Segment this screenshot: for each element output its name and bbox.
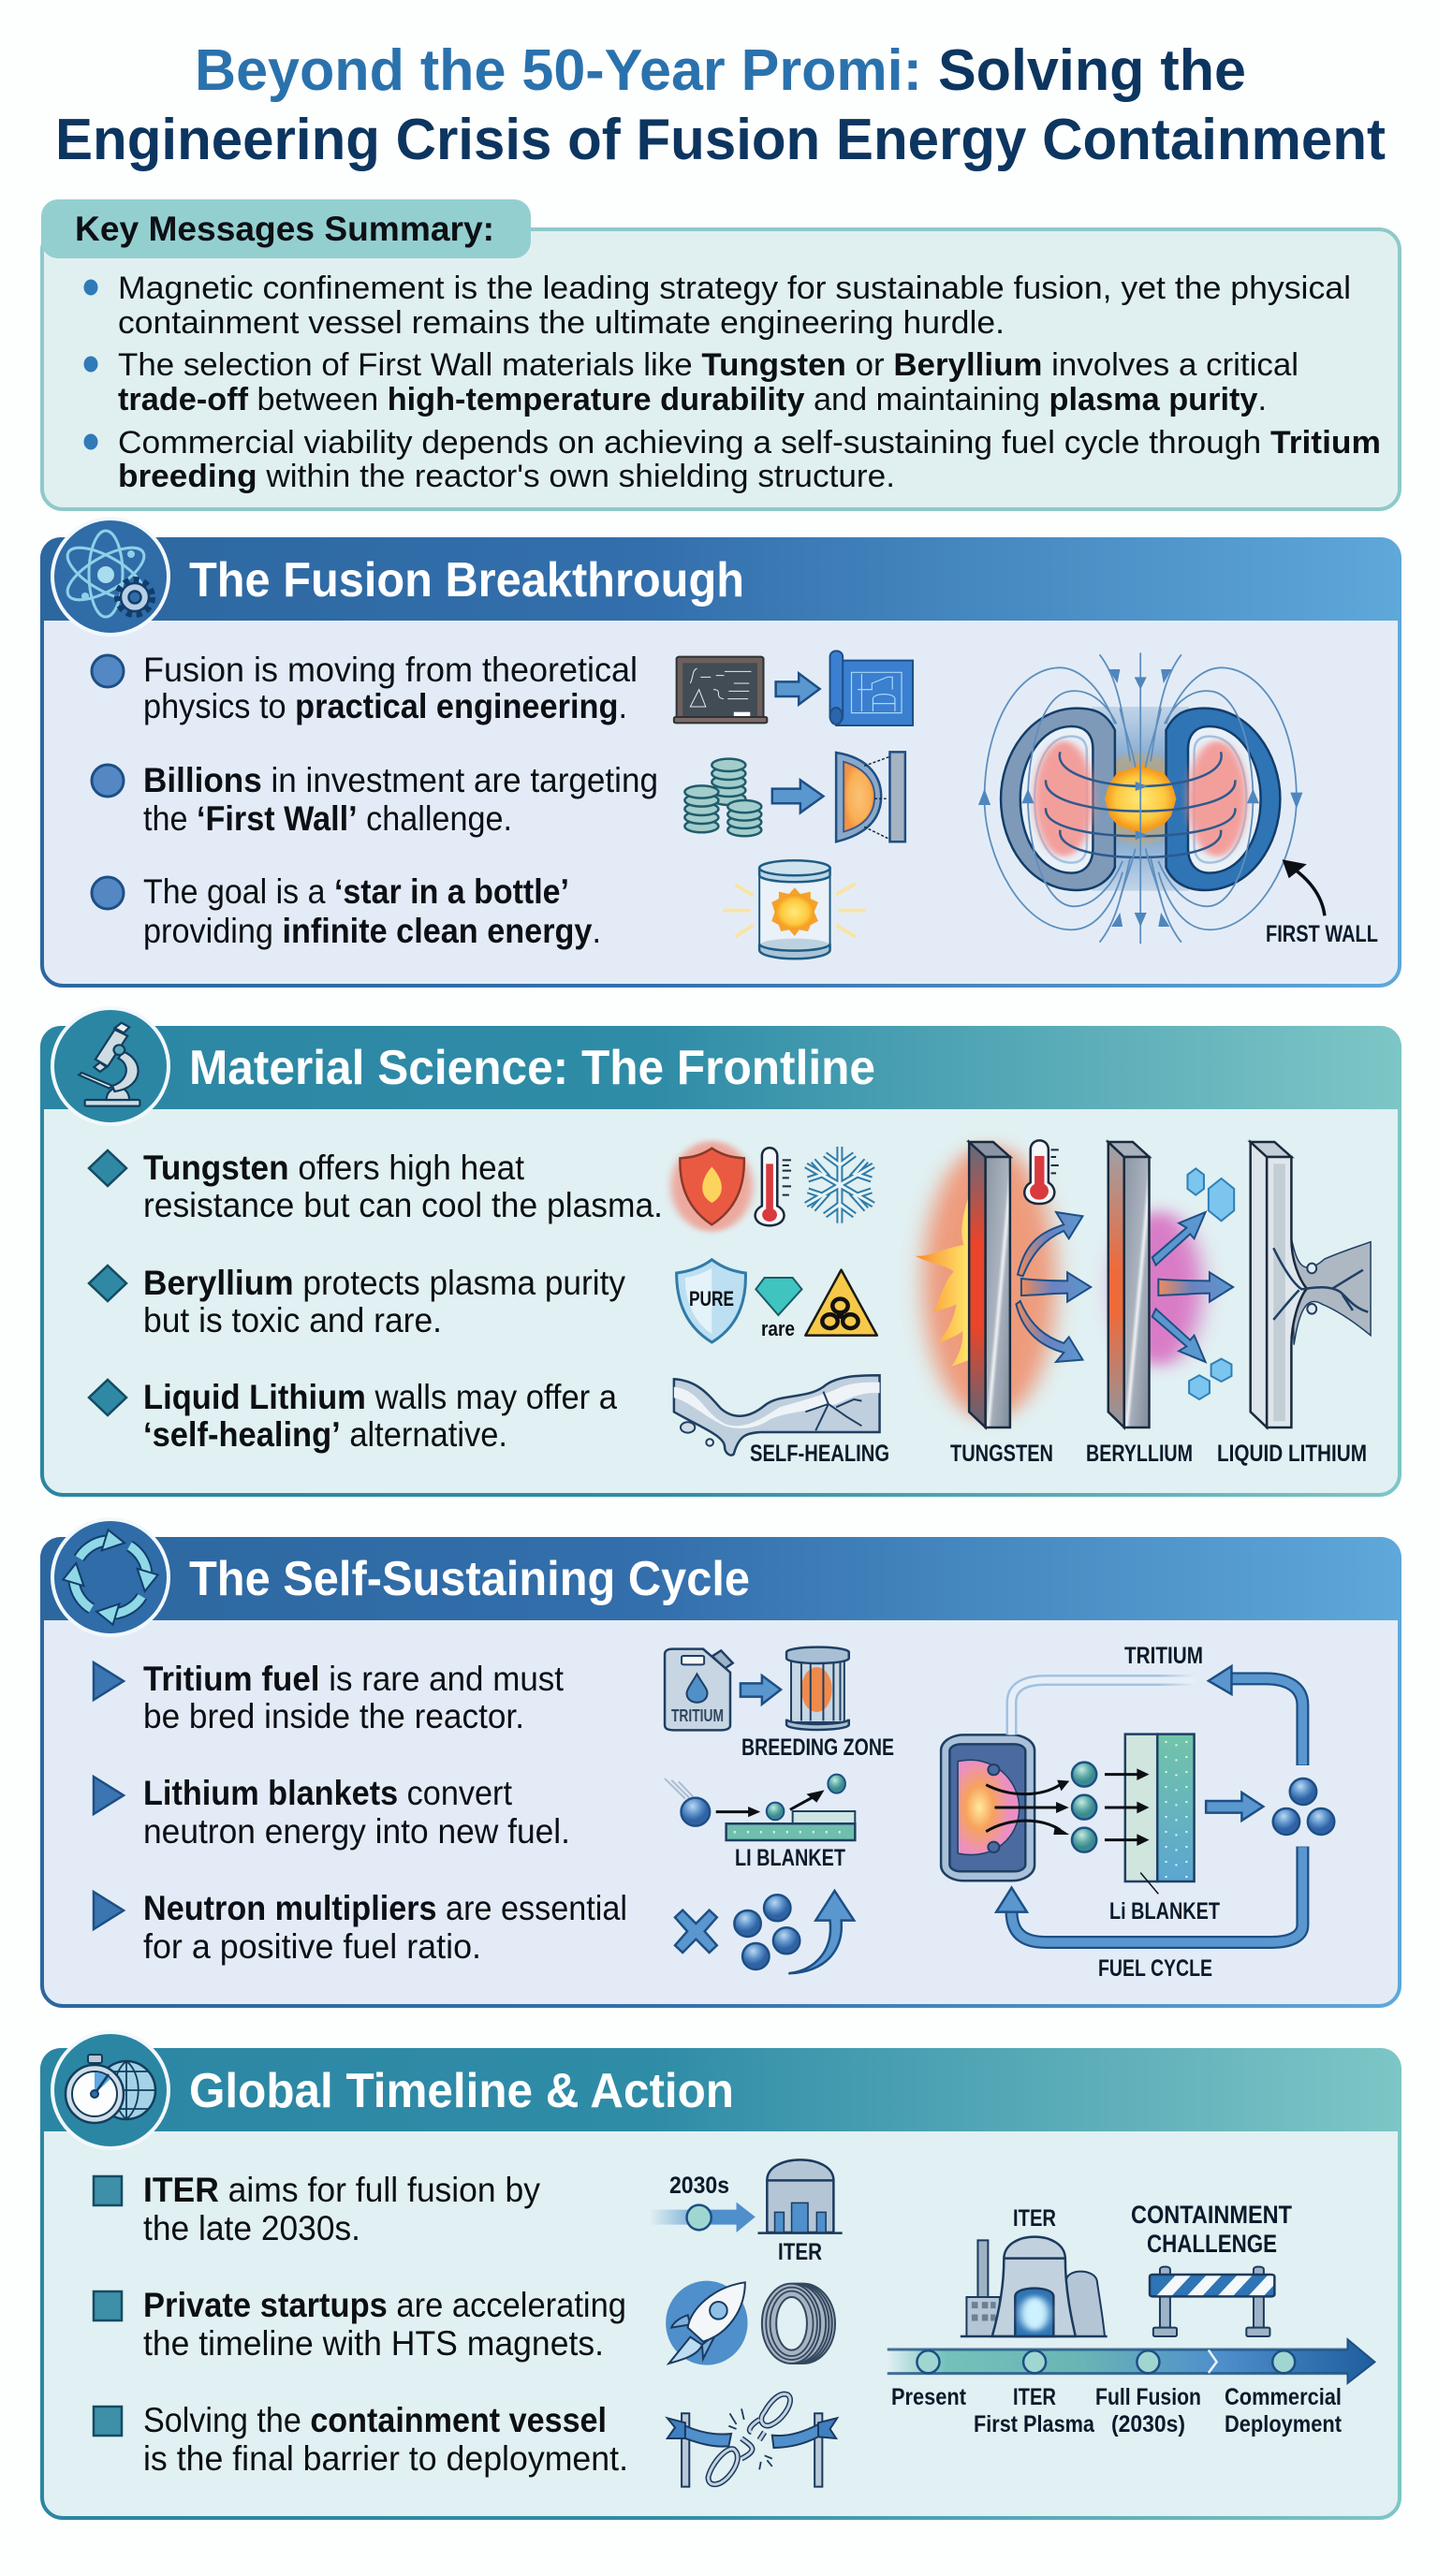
icon: coins to first wall [684, 752, 905, 842]
section header bar [40, 537, 1401, 621]
icon: atom and gear [52, 519, 169, 635]
bullet 1: Tungsten offers high heat [143, 1149, 525, 1187]
tritium return pipe [1012, 1680, 1196, 1734]
bullet 2 [92, 761, 658, 838]
teal particles [1072, 1763, 1096, 1852]
bullet 2: Private startups are accelerating [143, 2286, 626, 2324]
neutron arrows [986, 1780, 1069, 1835]
bullet 3: Solving the containment vessel [143, 2401, 607, 2439]
cycle illustrations [665, 1647, 1334, 1973]
li blanket block [1105, 1734, 1195, 1894]
icon: chalkboard to blueprint [674, 651, 913, 725]
cycle arrows [996, 1666, 1302, 1942]
bullet 3 [94, 1889, 627, 1966]
message 3: breeding within the reactor's own shielding structure. [118, 459, 895, 494]
bullet 1: Fusion is moving from theoretical [143, 651, 638, 689]
title [55, 38, 1386, 172]
message 2: trade-off between high-temperature durability and maintaining plasma purity. [118, 382, 1267, 417]
reactor vessel [941, 1734, 1034, 1881]
bullet 2 [89, 1264, 625, 1339]
bullet 2: neutron energy into new fuel. [143, 1812, 570, 1851]
bullet 1: the late 2030s. [143, 2209, 360, 2247]
label: li blanket: LI BLANKET [735, 1845, 845, 1871]
bullet 2: Beryllium protects plasma purity [143, 1264, 625, 1302]
bullet 3 [94, 2401, 628, 2478]
bullet 1 [94, 1660, 565, 1735]
timeline illustrations [650, 2159, 1374, 2487]
bullet 1: be bred inside the reactor. [143, 1697, 524, 1735]
panel: self-sustaining cycle [40, 1519, 1401, 2006]
icon: neutron hitting li blanket [665, 1775, 855, 1840]
fuel cycle diagram [941, 1666, 1334, 1942]
magnetic field lines [978, 652, 1302, 944]
material illustrations [671, 1140, 1371, 1456]
message 3: Commercial viability depends on achieving a self-sustaining fuel cycle through Tritium [118, 425, 1381, 461]
section heading: Global Timeline & Action [189, 2064, 734, 2118]
icon: broken chain and banner [668, 2394, 837, 2487]
icon: microscope [52, 1008, 169, 1124]
message 2: The selection of First Wall materials like Tungsten or Beryllium involves a critical [118, 347, 1299, 383]
timeline label: commercial deployment [1225, 2384, 1343, 2437]
timeline arrow [888, 2339, 1374, 2383]
bullet 2: but is toxic and rare. [143, 1301, 442, 1339]
bullet 3: The goal is a ‘star in a bottle’ [143, 872, 569, 911]
message 3 [84, 425, 1381, 494]
bullet 3: for a positive fuel ratio. [143, 1927, 481, 1966]
message 1 [84, 271, 1351, 341]
icon: rocket and hts coil [666, 2281, 835, 2365]
label: liquid lithium: LIQUID LITHIUM [1217, 1441, 1367, 1467]
icon: neutron multiplier [675, 1891, 854, 1973]
timeline label: commercial deployment: Deployment [1225, 2411, 1343, 2437]
message 1: Magnetic confinement is the leading strategy for sustainable fusion, yet the physical [118, 271, 1351, 306]
section heading: The Self-Sustaining Cycle [189, 1552, 750, 1606]
tungsten wall [916, 1140, 1091, 1427]
bullet 2 [94, 1774, 570, 1851]
label: 2030s: 2030s [669, 2173, 729, 2199]
bullet 1 [89, 1149, 663, 1224]
bullet 3: Neutron multipliers are essential [143, 1889, 627, 1927]
bullet 3 [92, 872, 601, 950]
liquid lithium wall [1251, 1142, 1371, 1427]
bullet 1: ITER aims for full fusion by [143, 2171, 540, 2209]
label: iter icon: ITER [778, 2239, 822, 2265]
section heading: Material Science: The Frontline [189, 1041, 875, 1095]
message 2 [84, 347, 1299, 417]
bullet 2: the timeline with HTS magnets. [143, 2324, 604, 2363]
label: iter facility: ITER [1013, 2205, 1056, 2232]
icon: circular arrows [52, 1519, 169, 1635]
bullet 3 [89, 1378, 617, 1454]
panel: the fusion breakthrough [40, 519, 1401, 986]
bullet 1 [94, 2171, 540, 2247]
left coil [1001, 709, 1115, 890]
icon: 2030s arrow to iter building [650, 2159, 843, 2233]
section header bar [40, 1026, 1401, 1109]
timeline label: full fusion 2030s: (2030s) [1111, 2411, 1185, 2437]
bullet 2: Billions in investment are targeting [143, 761, 658, 799]
label: li blanket diagram: Li BLANKET [1109, 1898, 1220, 1925]
label: breeding zone: BREEDING ZONE [741, 1734, 894, 1761]
label: tritium: TRITIUM [1124, 1643, 1203, 1669]
label: tungsten: TUNGSTEN [950, 1441, 1053, 1467]
bullet 3: is the final barrier to deployment. [143, 2439, 628, 2478]
icons: fusion bullets [674, 651, 1325, 959]
section header bar [40, 2048, 1401, 2131]
icon: stopwatch and globe [52, 2032, 169, 2148]
message 1: containment vessel remains the ultimate engineering hurdle. [118, 305, 1005, 341]
timeline label: present: Present [891, 2384, 967, 2410]
bullet 2: Lithium blankets convert [143, 1774, 513, 1812]
label: containment challenge: CHALLENGE [1147, 2230, 1277, 2258]
icon: pure shield, gem and biohazard [677, 1260, 877, 1342]
timeline label: iter first plasma: First Plasma [974, 2411, 1095, 2437]
right coil [1167, 709, 1280, 890]
timeline label: iter first plasma [974, 2384, 1095, 2437]
bullet 1: resistance but can cool the plasma. [143, 1186, 663, 1224]
icon: tritium jug to breeding zone [665, 1647, 849, 1730]
label: rare: rare [761, 1317, 795, 1340]
label: fuel cycle: FUEL CYCLE [1098, 1955, 1212, 1982]
bullet 3: ‘self-healing’ alternative. [143, 1415, 507, 1454]
first wall arrow [1283, 859, 1325, 915]
bullet 2: the ‘First Wall’ challenge. [143, 799, 512, 838]
label: containment challenge [1131, 2201, 1292, 2258]
key messages tab [41, 199, 531, 258]
label: tritium jug: TRITIUM [671, 1706, 724, 1725]
first wall label: FIRST WALL [1266, 921, 1378, 947]
beryllium wall [1108, 1142, 1234, 1427]
tokamak diagram [978, 652, 1325, 944]
panel: key messages summary [41, 199, 1400, 509]
toroidal field rings [1046, 752, 1235, 857]
icon: self-healing liquid wall [674, 1375, 880, 1456]
bullet 3: providing infinite clean energy. [143, 912, 601, 950]
bullet 1: physics to practical engineering. [143, 687, 627, 725]
timeline label: iter first plasma: ITER [1013, 2384, 1056, 2410]
timeline label: full fusion 2030s [1095, 2384, 1201, 2437]
section header bar [40, 1537, 1401, 1620]
icon: star in a bottle [725, 860, 864, 959]
timeline label: full fusion 2030s: Full Fusion [1095, 2384, 1201, 2410]
plasma sun core [1105, 763, 1176, 835]
bullet 3: Liquid Lithium walls may offer a [143, 1378, 617, 1416]
bullet 1: Tritium fuel is rare and must [143, 1660, 565, 1698]
bullet 2 [94, 2286, 626, 2363]
panel: global timeline and action [40, 2032, 1401, 2518]
timeline label: commercial deployment: Commercial [1225, 2384, 1342, 2410]
iter facility [961, 2237, 1108, 2336]
containment barrier [1150, 2267, 1284, 2336]
title: Engineering Crisis of Fusion Energy Containment [55, 108, 1386, 172]
label: containment challenge: CONTAINMENT [1131, 2201, 1292, 2229]
icon: heat shield, thermometer and snowflake [671, 1141, 873, 1232]
panel: material science [40, 1008, 1401, 1495]
key messages tab: Key Messages Summary: [75, 210, 494, 248]
label: beryllium: BERYLLIUM [1086, 1441, 1193, 1467]
bullet 1 [92, 651, 638, 725]
title: Beyond the 50-Year Promi: Solving the [195, 38, 1246, 103]
section heading: The Fusion Breakthrough [189, 553, 744, 607]
label: pure: PURE [689, 1287, 734, 1310]
label: self-healing: SELF-HEALING [750, 1441, 889, 1467]
output arrow and particles [1206, 1778, 1334, 1835]
